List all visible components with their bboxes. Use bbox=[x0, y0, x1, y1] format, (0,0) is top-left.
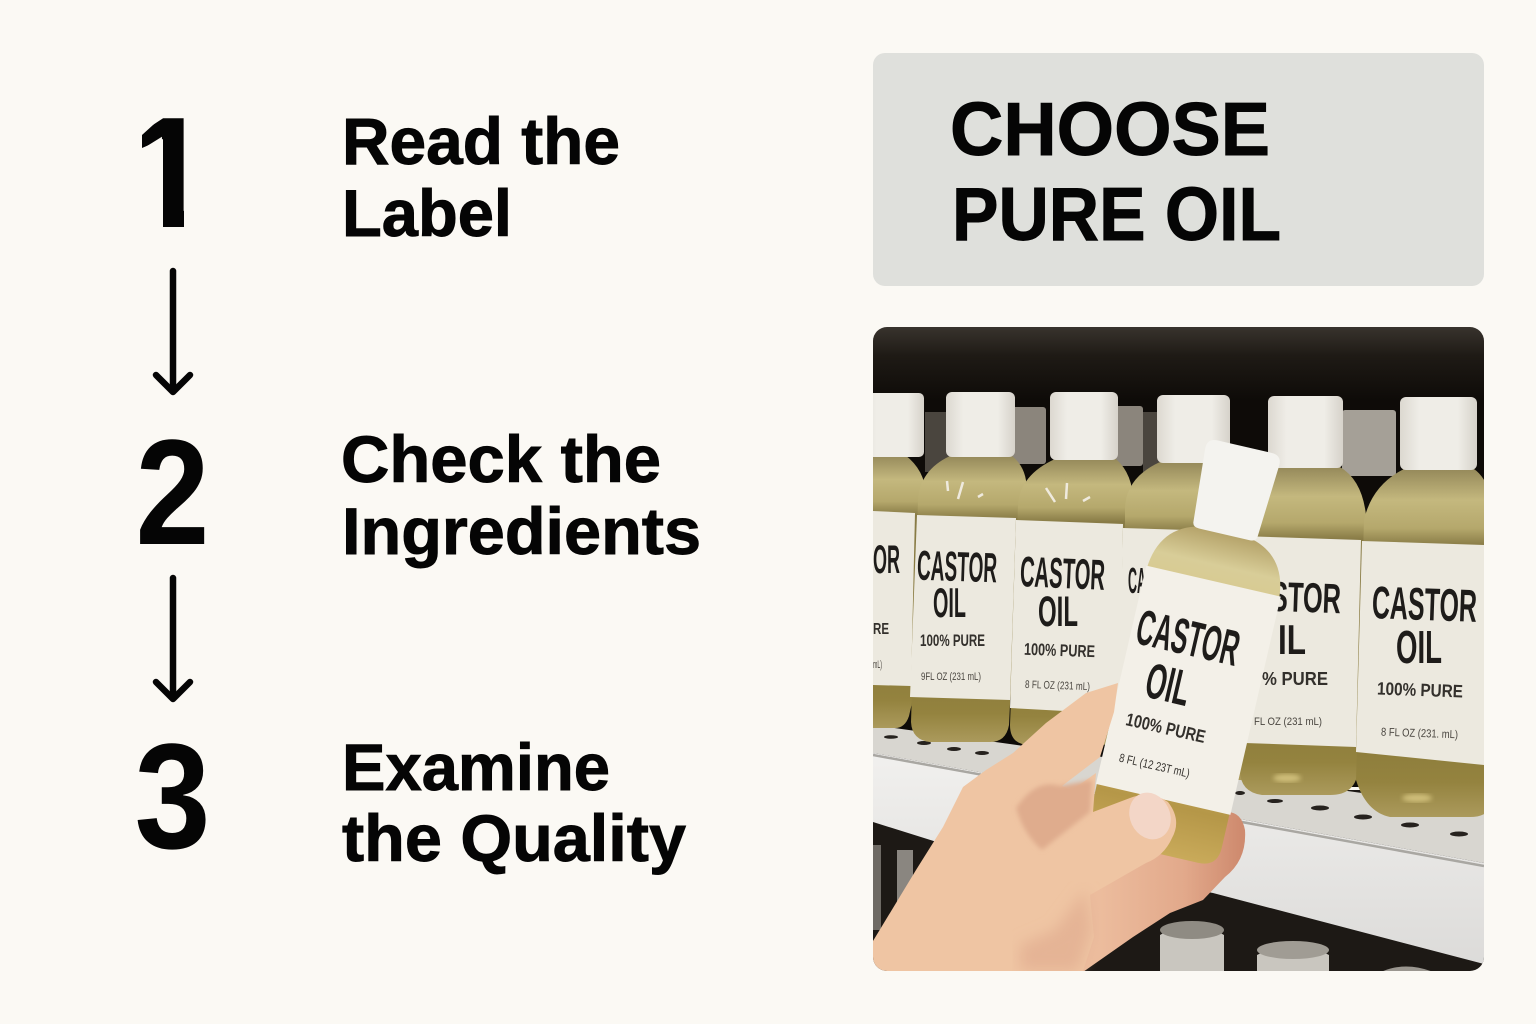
heading text: CHOOSE bbox=[950, 87, 1270, 171]
shelf top surface with peg holes bbox=[873, 725, 1484, 863]
panel: choose pure oil heading bbox=[873, 53, 1484, 286]
shading between index finger and thumb bbox=[1016, 780, 1092, 850]
shelf front fascia bbox=[873, 753, 1484, 964]
held bottle with label bbox=[1093, 440, 1281, 864]
shelf lip line bbox=[873, 755, 1484, 866]
rear row of bottle caps bbox=[925, 406, 1396, 476]
bottle D, behind the held bottle bbox=[1118, 395, 1250, 780]
dark shelf backdrop bbox=[873, 327, 1484, 787]
step 3 text: the Quality bbox=[342, 801, 686, 875]
held label text: OIL bbox=[1140, 652, 1196, 717]
held label text bbox=[1119, 610, 1240, 780]
heading background bbox=[873, 53, 1484, 286]
bottle A, cropped at left: OR bbox=[873, 538, 900, 582]
rear fingers behind the held bottle bbox=[1083, 812, 1246, 971]
bottle E bbox=[1240, 396, 1366, 795]
thumbnail bbox=[1129, 792, 1171, 840]
held bottle body bbox=[1093, 526, 1280, 864]
bottle B: 9FL OZ (231 mL) bbox=[921, 671, 981, 683]
step 1 text bbox=[342, 104, 620, 250]
bottle B bbox=[910, 392, 1027, 742]
step 2 text bbox=[341, 422, 701, 568]
heading text: PURE OIL bbox=[952, 172, 1281, 256]
step 2 text: Check the bbox=[341, 422, 661, 496]
held label text: CASTOR bbox=[1131, 599, 1245, 677]
step 3 text: Examine bbox=[342, 730, 610, 804]
step 1 text: Label bbox=[342, 176, 512, 250]
step 1 number: 1 bbox=[125, 85, 213, 261]
bottle F: OIL bbox=[1396, 621, 1442, 673]
bottle C: 8 FL OZ (231 mL) bbox=[1025, 679, 1090, 693]
bottle C: CASTOR bbox=[1019, 548, 1106, 600]
step 3 number: 3 bbox=[134, 712, 210, 880]
held label text: 100% PURE bbox=[1124, 709, 1207, 747]
bottle E: IL bbox=[1278, 616, 1306, 663]
bottle B: CASTOR bbox=[916, 542, 998, 591]
bottle C: OIL bbox=[1038, 588, 1078, 636]
arrow from step 1 to step 2 bbox=[156, 271, 190, 392]
bottle F: 8 FL OZ (231. mL) bbox=[1381, 727, 1458, 741]
step 3 text bbox=[342, 730, 686, 875]
steps column bbox=[125, 85, 701, 880]
step 2 number: 2 bbox=[136, 408, 210, 576]
bottle C bbox=[1010, 392, 1133, 745]
heading text bbox=[950, 87, 1281, 256]
hand: palm, index finger and thumb bbox=[873, 683, 1178, 971]
photo: hand holding castor oil bottle at a store shelf bbox=[860, 327, 1495, 980]
arrow from step 2 to step 3 bbox=[156, 578, 190, 699]
step 1 text: Read the bbox=[342, 104, 620, 178]
bottle F: 100% PURE bbox=[1377, 679, 1463, 701]
bottle E: % PURE bbox=[1262, 669, 1328, 689]
held label text: 8 FL (12 23T mL) bbox=[1118, 751, 1191, 780]
held bottle label bbox=[1096, 566, 1281, 815]
bottle F bbox=[1356, 397, 1495, 817]
held bottle cap bbox=[1193, 440, 1280, 540]
bottle B: 100% PURE bbox=[920, 631, 985, 650]
palm and fingers bbox=[873, 683, 1176, 971]
bottle A, cropped at left: RE bbox=[873, 621, 889, 638]
bottle B: OIL bbox=[933, 579, 966, 626]
bottle A, cropped at left bbox=[873, 393, 924, 728]
step 2 text: Ingredients bbox=[342, 494, 701, 568]
shading on lower palm bbox=[1020, 900, 1092, 971]
bottle C: 100% PURE bbox=[1024, 640, 1095, 661]
bottle A, cropped at left: mL) bbox=[873, 659, 882, 671]
lower shelf backdrop bbox=[873, 790, 1484, 980]
bottle D, behind the held bottle: CA bbox=[1128, 560, 1146, 601]
bottle E: STOR bbox=[1270, 573, 1342, 622]
bottle E: FL OZ (231 mL) bbox=[1254, 716, 1322, 728]
